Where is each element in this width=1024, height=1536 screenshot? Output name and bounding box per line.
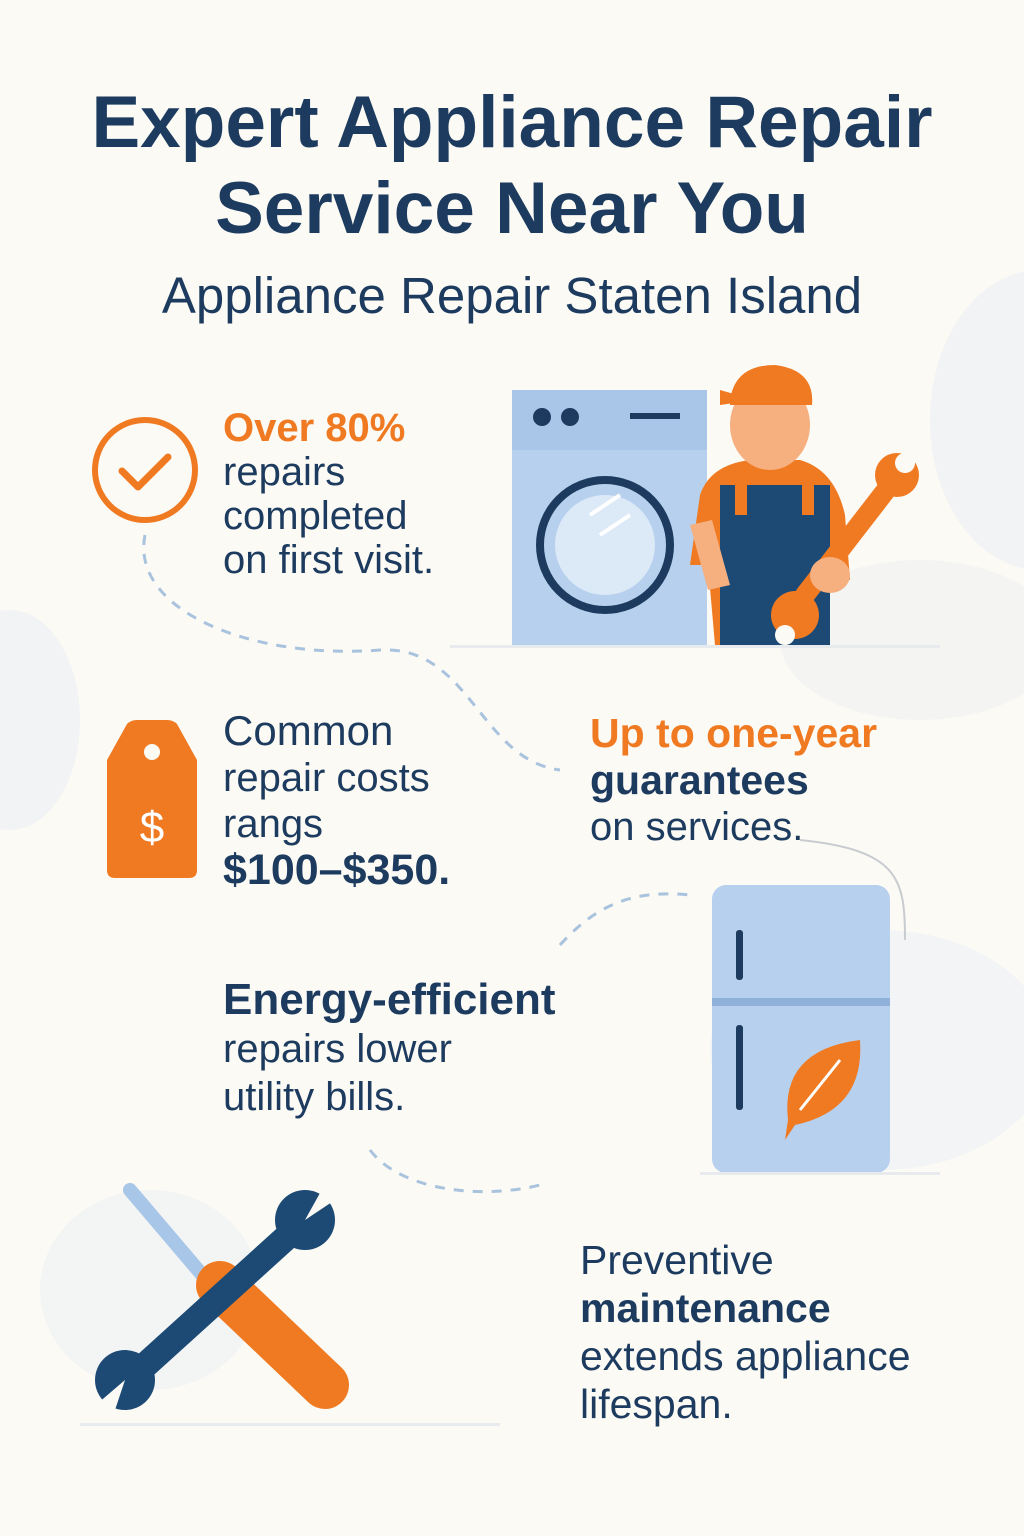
text: repair costs: rangs — [223, 802, 323, 846]
text: energy efficient — [223, 975, 556, 1119]
title: Expert Appliance Repair — [91, 82, 933, 163]
text: energy efficient: utility bills. — [223, 1075, 405, 1119]
icon: price tag — [107, 720, 197, 878]
icon: price tag: $ — [140, 803, 164, 852]
title: Service Near You — [215, 168, 809, 249]
text: guarantees: Up to one-year — [590, 710, 877, 756]
text: preventive maintenance: extends appliance — [580, 1333, 911, 1379]
text: preventive maintenance: Preventive — [580, 1237, 774, 1283]
illustration: fridge with leaf — [700, 885, 940, 1175]
text: guarantees — [590, 710, 877, 849]
icon: wrench and screwdriver — [80, 1183, 500, 1426]
text: repair costs: Common — [223, 707, 393, 754]
text: repair costs — [223, 707, 450, 894]
text: preventive maintenance: lifespan. — [580, 1381, 733, 1427]
text: first visit: on first visit. — [223, 538, 434, 582]
text: guarantees: guarantees — [590, 757, 809, 803]
text: guarantees: on services. — [590, 805, 803, 849]
text: repair costs: $100–$350. — [223, 846, 450, 894]
text: first visit: Over 80% — [223, 406, 405, 450]
text: first visit: repairs — [223, 450, 345, 494]
illustration: washer and technician — [450, 365, 940, 648]
subtitle: Appliance Repair Staten Island — [162, 267, 862, 324]
text: first visit: completed — [223, 494, 408, 538]
text: energy efficient: Energy-efficient — [223, 975, 556, 1024]
text: preventive maintenance — [580, 1237, 911, 1427]
text: energy efficient: repairs lower — [223, 1027, 452, 1071]
text: repair costs: repair costs — [223, 756, 430, 800]
icon: check circle — [92, 417, 198, 523]
text: first visit — [223, 406, 434, 582]
title — [91, 82, 933, 249]
text: preventive maintenance: maintenance — [580, 1285, 831, 1331]
